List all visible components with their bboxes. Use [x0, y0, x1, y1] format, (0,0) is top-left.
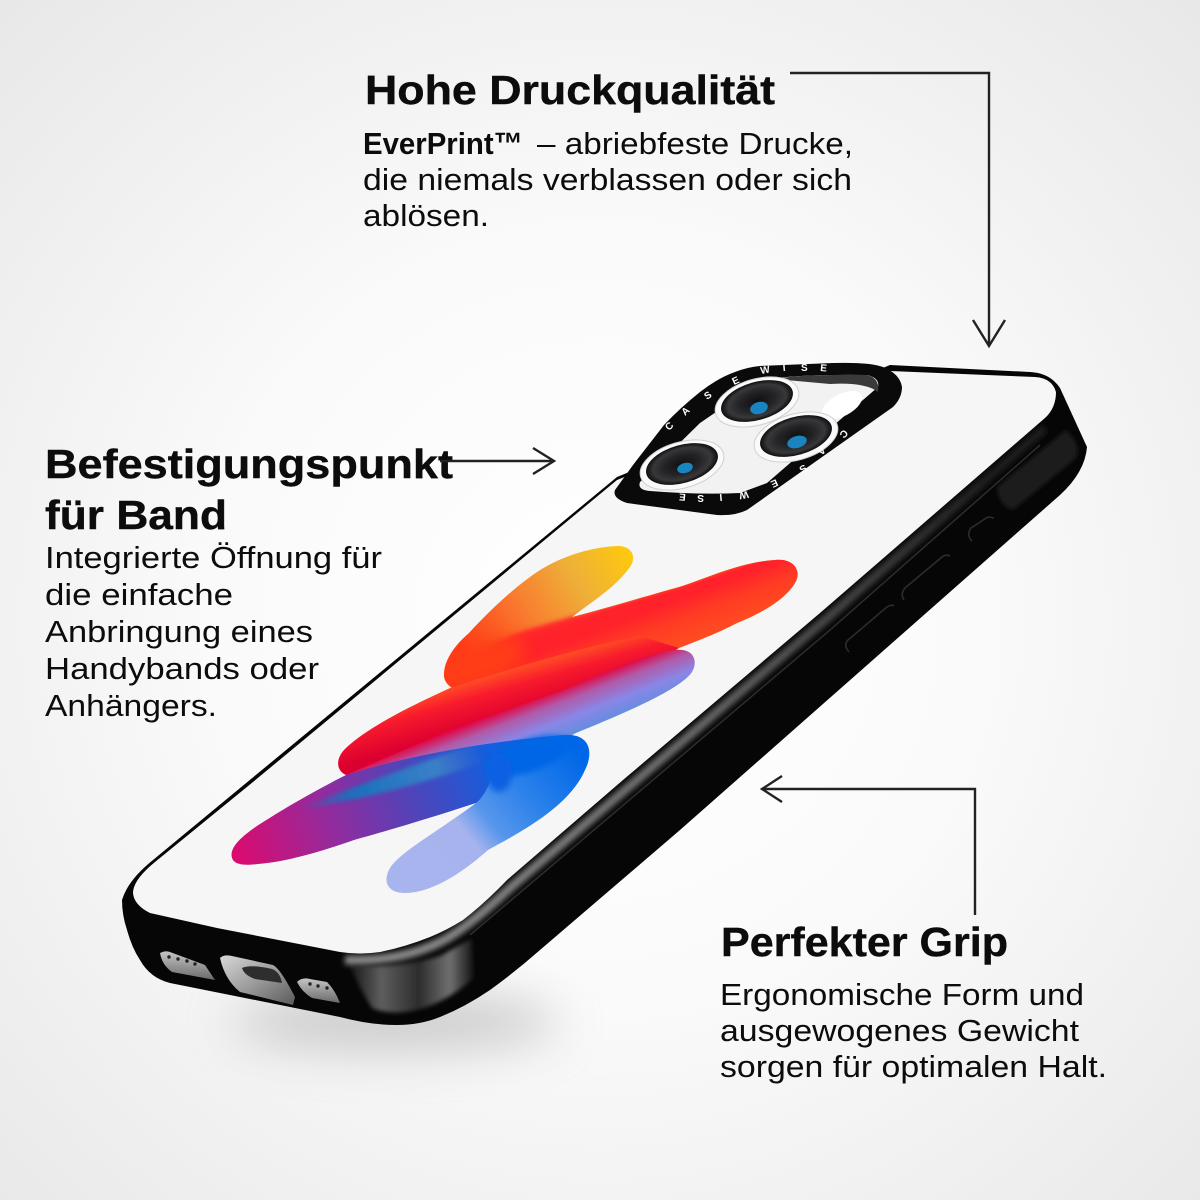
camera glass — [639, 375, 878, 494]
arrow: print quality to top of case — [790, 73, 1005, 346]
red upper bar — [450, 560, 798, 688]
right speaker grill — [297, 978, 340, 1003]
magenta to blue bar — [232, 735, 563, 865]
brand ring text top: CASEWISE — [663, 363, 828, 433]
body text: ausgewogenes Gewicht — [720, 1013, 1079, 1048]
crimson bar — [338, 636, 679, 775]
case body — [122, 365, 1087, 1025]
bar to arm blend — [486, 754, 512, 792]
lens top — [709, 368, 805, 436]
body text: Anbringung eines — [45, 614, 313, 649]
teal inner shadow — [305, 749, 472, 809]
yellow blob — [444, 546, 798, 688]
body text: Ergonomische Form und — [720, 977, 1084, 1012]
camera island — [614, 363, 902, 515]
left speaker grill — [160, 951, 215, 980]
lens left — [634, 431, 730, 499]
charging port — [220, 955, 295, 1005]
port slot — [242, 966, 282, 983]
bevel along edge — [345, 428, 1045, 960]
callout: strap attachment — [45, 441, 453, 723]
inner top shadow — [775, 375, 878, 392]
heading: Perfekter Grip — [721, 919, 1008, 965]
heading: Hohe Druckqualität — [365, 67, 775, 113]
heading: für Band — [45, 492, 227, 538]
body text: die niemals verblassen oder sich — [363, 162, 852, 197]
body text: EverPrint™ — [363, 126, 523, 161]
colourful swoosh artwork — [220, 530, 810, 893]
deep blue joint — [481, 727, 575, 785]
body text: Handybands oder — [45, 651, 319, 686]
callout: grip — [720, 919, 1107, 1084]
body text: Anhängers. — [45, 688, 217, 723]
orange left end — [444, 632, 530, 688]
body text — [720, 977, 1107, 1084]
heading: Befestigungspunkt — [45, 441, 453, 487]
side highlight panel — [997, 430, 1078, 510]
body text: Integrierte Öffnung für — [45, 540, 382, 575]
glossy corner — [350, 938, 474, 1012]
callout: print quality — [363, 67, 853, 233]
body text: ablösen. — [363, 198, 489, 233]
left speaker holes — [167, 955, 197, 966]
heading — [45, 441, 453, 538]
body text: die einfache — [45, 577, 233, 612]
flash — [817, 385, 867, 425]
side buttons and groove — [470, 445, 1040, 935]
arrow: strap attachment — [440, 448, 554, 474]
lens right — [748, 403, 844, 471]
body text — [45, 540, 382, 723]
yellow and red upper swoosh — [444, 546, 798, 688]
purple bar — [346, 650, 695, 790]
body text: sorgen für optimalen Halt. — [720, 1049, 1107, 1084]
body text — [363, 126, 853, 233]
brand ring text bottom: CASEWISE — [678, 427, 850, 503]
phone with case — [122, 363, 1087, 1052]
arrow: grip — [762, 776, 975, 915]
blue to lavender arm — [386, 735, 589, 893]
back face — [133, 371, 1056, 954]
ground shadow — [230, 992, 560, 1052]
body text: – abriebfeste Drucke, — [537, 126, 853, 161]
right speaker holes — [308, 982, 329, 990]
